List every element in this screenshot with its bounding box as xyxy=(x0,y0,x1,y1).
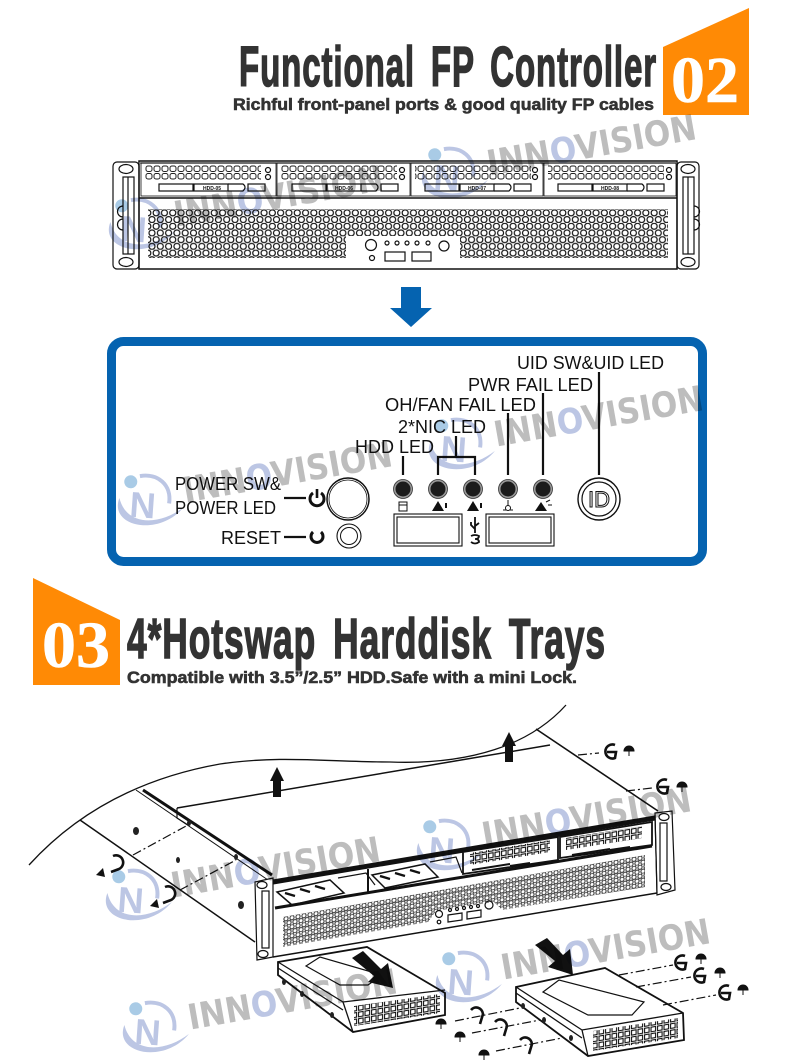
watermark: top: N xyxy=(432,157,461,199)
chassis left ear xyxy=(255,878,273,960)
watermark: bottom left xyxy=(118,957,402,1059)
watermark: bottom right: INNOVISION xyxy=(498,912,714,989)
ID button: ID xyxy=(588,487,610,512)
watermark: front view: N xyxy=(119,208,148,250)
left rack ear xyxy=(113,162,139,269)
watermark: panel right: INNOVISION xyxy=(491,379,707,456)
hard disk bay 08 xyxy=(544,163,676,196)
leader lines xyxy=(403,372,599,475)
watermark: chassis left xyxy=(101,825,385,927)
left hard disk tray xyxy=(278,947,445,1032)
power and reset labels xyxy=(175,474,281,548)
chassis front xyxy=(273,815,657,957)
LED indicators xyxy=(394,480,552,498)
LED callout labels: OH/FAN FAIL LED xyxy=(385,395,536,415)
perforated front grille xyxy=(148,209,668,236)
watermark: panel right: N xyxy=(439,428,468,470)
server front view drawing xyxy=(113,161,700,269)
empty bays with tray rails xyxy=(277,857,462,905)
watermark: panel left xyxy=(113,430,397,532)
watermark: chassis left: N xyxy=(116,879,145,921)
section 03 number badge xyxy=(33,578,120,685)
watermark: chassis left: INNOVISION xyxy=(168,830,384,907)
power and reset labels: POWER SW& xyxy=(175,474,281,494)
3D grille xyxy=(283,855,645,947)
arrow: insert left tray xyxy=(352,951,393,988)
icon: power symbol xyxy=(284,489,324,506)
hard disk bay 06: HDD-06 xyxy=(335,186,353,192)
side screw guides xyxy=(96,825,236,908)
hard disk bay 07 xyxy=(411,163,543,196)
right rack ear xyxy=(677,162,700,269)
section 03 number badge: 03 xyxy=(42,609,110,682)
watermark: panel right xyxy=(424,374,708,476)
LED callout labels: 2*NIC LED xyxy=(398,417,486,437)
hard disk bay 08: HDD-08 xyxy=(601,186,619,192)
chassis right ear xyxy=(655,811,675,895)
right hard disk tray xyxy=(516,968,684,1056)
3D front controls xyxy=(436,901,493,924)
watermark: bottom left: INNOVISION xyxy=(185,962,401,1039)
watermark: bottom right: N xyxy=(446,961,475,1003)
LED callout labels: HDD LED xyxy=(355,437,434,457)
subtitle: compatibility: Compatible with 3.5”/2.5” HDD.Safe with a mini Lock. xyxy=(127,668,577,687)
rear screw guides xyxy=(578,744,687,793)
icon: USB 3 symbol xyxy=(471,517,479,544)
LED callout labels: UID SW&UID LED xyxy=(517,353,664,373)
white mask around controls xyxy=(350,237,460,263)
watermark: panel left: N xyxy=(128,484,157,526)
LED callout labels xyxy=(355,353,664,457)
hard disk bay 05: HDD-05 xyxy=(203,186,221,192)
cover outline xyxy=(29,705,658,942)
arrow: down to detail panel xyxy=(390,287,432,327)
power button xyxy=(327,478,369,520)
watermark: top: INNOVISION xyxy=(484,108,700,185)
watermark: chassis right xyxy=(412,775,696,877)
side mounting holes xyxy=(133,820,244,909)
chassis outline xyxy=(139,161,677,269)
USB ports xyxy=(394,514,554,546)
hard disk bay 06 xyxy=(277,163,410,196)
front control buttons and ports xyxy=(366,240,449,261)
power and reset labels: RESET xyxy=(221,528,281,548)
LED function icons xyxy=(399,500,552,511)
watermark: bottom left: N xyxy=(133,1011,162,1053)
hard disk bay 07: HDD-07 xyxy=(468,186,486,192)
watermark: chassis right: N xyxy=(427,829,456,871)
LED callout labels: PWR FAIL LED xyxy=(468,375,593,395)
watermark: top xyxy=(417,103,701,205)
ID button xyxy=(578,478,620,520)
exploded chassis drawing xyxy=(29,705,687,960)
panel: front panel detail xyxy=(112,342,702,562)
tray screw guides bottom xyxy=(436,1007,562,1060)
watermark: panel left: INNOVISION xyxy=(180,435,396,512)
arrow: insert right tray xyxy=(535,938,573,975)
arrow: lift cover right xyxy=(502,732,516,762)
reset button xyxy=(337,524,361,548)
tray side screw guides right xyxy=(619,954,748,1005)
icon: reset symbol xyxy=(284,532,323,542)
arrow: lift cover left xyxy=(270,767,284,797)
section 02 number badge xyxy=(663,8,749,117)
installed drive trays xyxy=(463,822,652,874)
hard disk bay 05 xyxy=(141,163,276,196)
subtitle: front-panel ports: Richful front-panel ports & good quality FP cables xyxy=(233,95,654,114)
watermark: bottom right xyxy=(431,907,715,1009)
watermark: front view xyxy=(104,154,388,256)
power and reset labels: POWER LED xyxy=(175,498,276,518)
watermark: chassis right: INNOVISION xyxy=(479,780,695,857)
watermark: front view: INNOVISION xyxy=(171,159,387,236)
section 02 number badge: 02 xyxy=(671,44,739,117)
